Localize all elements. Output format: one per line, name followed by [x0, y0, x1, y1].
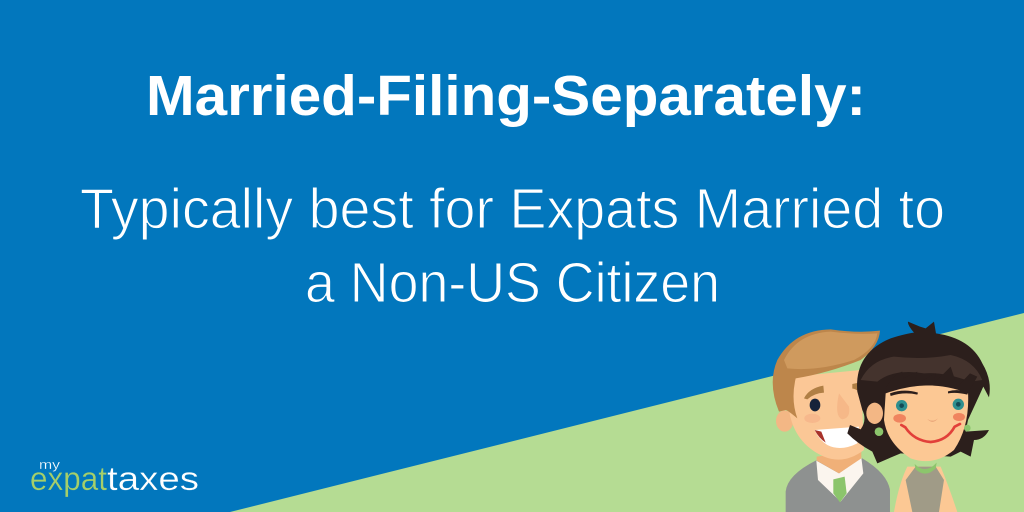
logo: my expat taxes: my: [39, 457, 61, 472]
subtitle: Typically best for Expats Married to: [80, 177, 945, 241]
woman smile: [901, 424, 960, 442]
man shirt collar: [816, 457, 863, 502]
woman: [847, 322, 990, 512]
man hair: [773, 329, 880, 418]
woman face: [884, 385, 968, 461]
subtitle: a Non-US Citizen: [305, 251, 720, 315]
man body: grey vest: [786, 458, 890, 512]
woman ear: [866, 403, 883, 424]
man hair highlight: [784, 332, 877, 369]
man neck: [817, 450, 861, 473]
woman hair highlight: [861, 355, 982, 382]
woman eyes: [896, 399, 964, 411]
man nose: [837, 393, 849, 419]
man second eyebrow: [852, 383, 859, 392]
green diagonal panel: [230, 313, 1024, 512]
man cheek: [804, 414, 820, 423]
woman back hair: [847, 322, 990, 463]
woman necklace: [915, 463, 937, 474]
woman dress: [906, 467, 944, 512]
woman eyebrows: [890, 390, 968, 396]
man eye: [810, 399, 820, 411]
man mouth corner: [815, 430, 826, 443]
woman nose: [927, 418, 938, 422]
man eyebrow: [804, 386, 824, 399]
woman shoulders and arms: [894, 467, 957, 512]
woman cheeks: [893, 413, 965, 423]
man ear: [776, 410, 793, 432]
woman fringe: [886, 367, 977, 393]
man face: [789, 370, 864, 460]
logo: my expat taxes: [30, 457, 199, 497]
illustration: couple: [773, 322, 990, 512]
woman earring left: [875, 427, 883, 436]
logo: my expat taxes: taxes: [107, 460, 199, 497]
subtitle: [80, 177, 945, 315]
title: Married-Filing-Separately:: [146, 64, 866, 128]
man: [773, 329, 890, 512]
man tie: [833, 477, 847, 502]
man smile: [815, 427, 859, 448]
woman earring right: [964, 425, 971, 431]
logo: my expat taxes: expat: [30, 460, 107, 497]
